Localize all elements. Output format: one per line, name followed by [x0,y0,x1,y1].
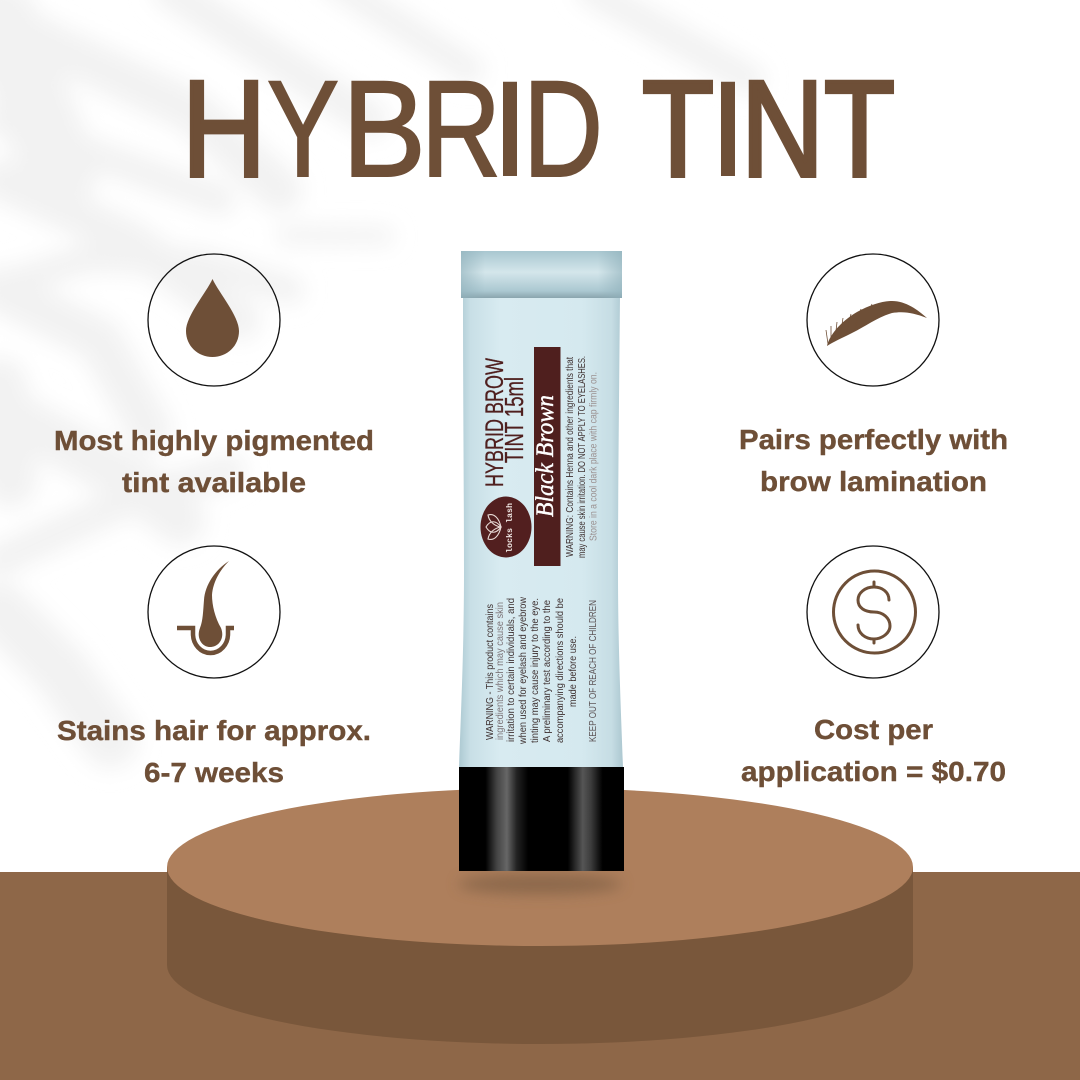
product name: HYBRID BROW [481,358,509,487]
shade label band: Black Brown [532,395,559,517]
lower warning text [485,596,599,745]
lower warning text: irritation to certain individuals, and [506,598,517,742]
caption: cost: Cost per [814,714,933,745]
lower warning text: WARNING - This product contains [485,604,496,740]
title [182,53,895,206]
title: T [642,53,714,206]
lower warning text: ingredients which may cause skin [495,602,506,740]
caption: pigment [54,425,374,498]
caption: pigment: Most highly pigmented [54,425,374,456]
feature: longevity [57,546,371,788]
lower warning text: tinting may cause injury to the eye. [530,598,541,743]
caption: longevity: 6-7 weeks [144,757,284,788]
tube crimp [461,251,622,298]
caption: longevity [57,715,371,788]
upper warning text: may cause skin irritation. DO NOT APPLY TO EYELASHES. [577,356,588,558]
lower warning text: made before use. [568,636,579,707]
icon: water drop [148,254,280,386]
caption: lamination: Pairs perfectly with [739,424,1008,455]
icon: hair follicle [148,546,280,678]
product name: TINT 15ml [499,377,529,463]
icon: eyebrow [807,254,939,386]
caption: longevity: Stains hair for approx. [57,715,371,746]
caption: cost [741,714,1006,787]
product tube [459,251,624,871]
title: N [741,53,824,206]
tube shadow [458,874,622,894]
title: I [714,53,742,206]
title: R [421,53,501,206]
lower warning text: KEEP OUT OF REACH OF CHILDREN [588,600,599,742]
upper warning text: Store in a cool dark place with cap firmly on. [588,372,600,541]
background: blurred palm leaf shadow [0,0,750,740]
lower warning text: accompanying directions should be [555,598,566,743]
feature: pigment [54,254,374,498]
caption: pigment: tint available [122,467,306,498]
title: H [182,53,266,206]
shade label band [532,347,560,566]
title: Y [267,53,339,206]
tube body [459,296,623,768]
title: T [824,53,895,206]
caption: lamination [739,424,1008,497]
title: D [523,53,603,206]
title: I [496,53,524,206]
brand logo [480,496,532,558]
round platform [167,788,913,1044]
feature: lamination [739,254,1008,497]
upper warning text: WARNING: Contains Henna and other ingredients that [565,357,576,557]
title: B [342,53,426,206]
floor band [0,872,1080,1080]
caption: cost: application = $0.70 [741,756,1006,787]
caption: lamination: brow lamination [760,466,987,497]
upper warning text [565,356,600,558]
feature: cost [741,546,1006,787]
product name [481,358,529,487]
icon: dollar coin [807,546,939,678]
lower warning text: A preliminary test according to the [542,600,553,742]
lower warning text: when used for eyelash and eyebrow [518,596,529,745]
brand logo: locks lash [505,503,515,553]
tube cap [459,767,624,871]
